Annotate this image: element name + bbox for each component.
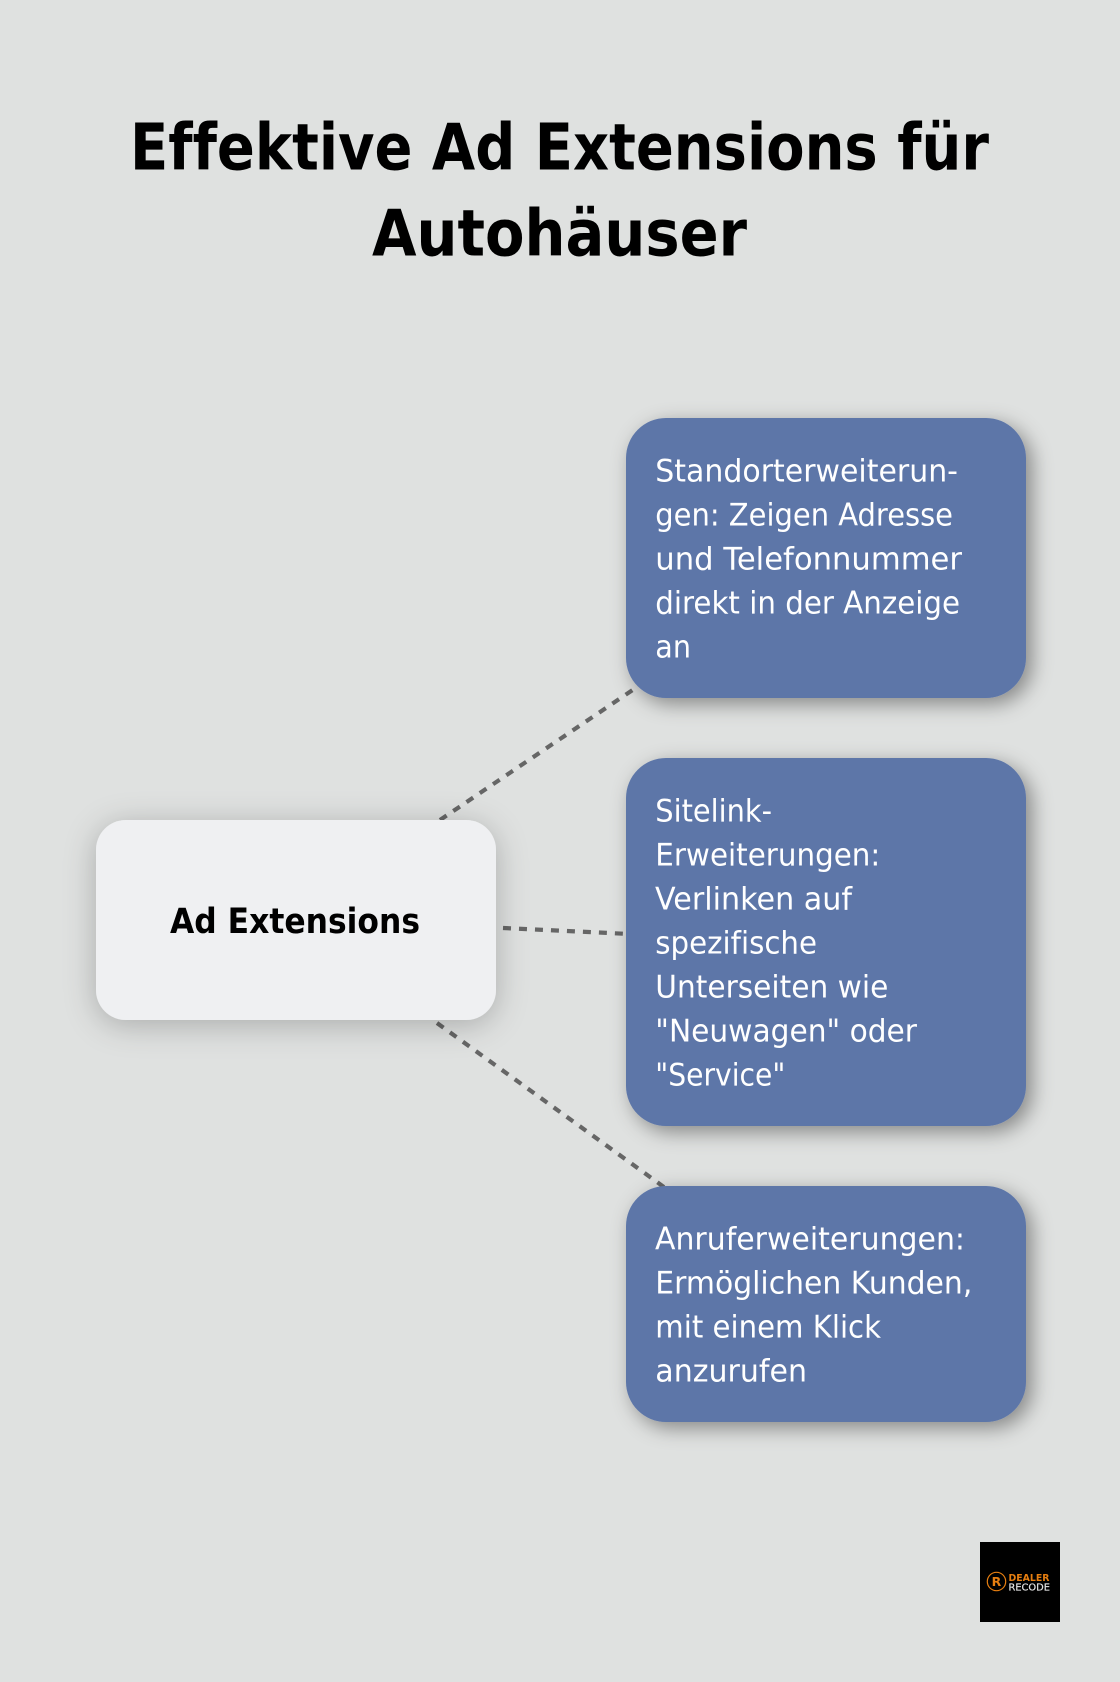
logo: Dealer Recode: DEALER (1008, 1573, 1050, 1584)
panel text: an (655, 630, 691, 666)
panel text: spezifische (655, 926, 817, 962)
panel text (655, 794, 917, 1094)
panel text: und Telefonnummer (655, 542, 962, 578)
logo: Dealer Recode: RECODE (1008, 1582, 1050, 1594)
panel text: Standorterweiterun- (655, 454, 958, 490)
panel text: Sitelink- (655, 794, 772, 830)
panel label: Ad Extensions (170, 902, 420, 942)
title (130, 110, 989, 272)
connector: center to Sitelink-Erweiterungen (503, 928, 630, 934)
panel: Standorterweiterungen (626, 418, 1026, 698)
panel text: Anruferweiterungen: (655, 1222, 965, 1258)
panel text: direkt in der Anzeige (655, 586, 960, 622)
title: Autohäuser (372, 196, 747, 272)
icon: R in circle: R (992, 1574, 1002, 1589)
panel text (655, 1222, 972, 1390)
connector: center to Standorterweiterungen (440, 685, 640, 820)
logo: Dealer Recode (980, 1542, 1060, 1622)
panel text: mit einem Klick (655, 1310, 881, 1346)
panel text: anzurufen (655, 1354, 807, 1390)
panel text: Unterseiten wie (655, 970, 888, 1006)
panel text: "Service" (655, 1058, 785, 1094)
panel text: gen: Zeigen Adresse (655, 498, 953, 534)
panel text: Ermöglichen Kunden, (655, 1266, 972, 1302)
connector: center to Anruferweiterungen (437, 1023, 668, 1190)
panel text (655, 454, 962, 666)
panel: Sitelink-Erweiterungen (626, 758, 1026, 1126)
panel: Ad Extensions (96, 820, 496, 1020)
panel text: Erweiterungen: (655, 838, 880, 874)
title: Effektive Ad Extensions für (130, 110, 989, 186)
panel text: "Neuwagen" oder (655, 1014, 917, 1050)
panel: Anruferweiterungen (626, 1186, 1026, 1422)
panel text: Verlinken auf (655, 882, 853, 918)
